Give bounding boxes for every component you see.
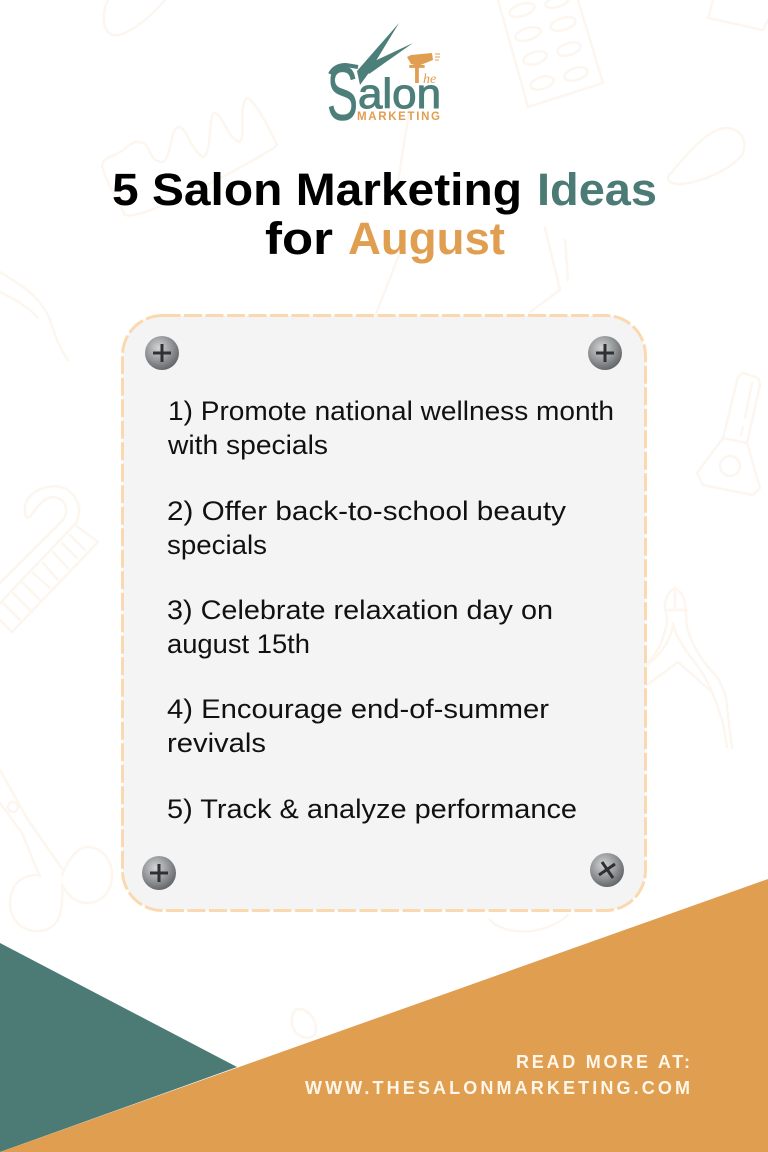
text: list of ideas: specials xyxy=(167,530,267,560)
logo word: Salon xyxy=(327,52,441,137)
text: list of ideas: with specials xyxy=(167,430,328,460)
icon: screw bottom right xyxy=(590,853,624,887)
text: list of ideas: 3) Celebrate relaxation day on xyxy=(167,595,553,625)
panel: ideas list card xyxy=(122,316,646,910)
bottom orange triangle xyxy=(0,879,768,1152)
icon: screw bottom left xyxy=(142,856,176,890)
logo word: Salon: alon xyxy=(358,70,441,117)
bottom teal triangle xyxy=(0,943,237,1152)
title: Ideas xyxy=(537,164,657,215)
logo word: The: he xyxy=(423,72,436,87)
logo word: Salon: S xyxy=(327,52,358,137)
logo xyxy=(327,23,441,137)
text: list of ideas xyxy=(167,396,614,824)
footer call to action xyxy=(305,1052,690,1098)
title xyxy=(112,164,657,264)
title: August xyxy=(348,213,505,264)
text: list of ideas: 2) Offer back-to-school beauty xyxy=(167,496,567,526)
text: list of ideas: 1) Promote national wellness month xyxy=(168,396,614,426)
footer call to action: WWW.THESALONMARKETING.COM xyxy=(305,1078,690,1098)
title: for xyxy=(265,213,333,264)
icon: hair dryer xyxy=(407,53,440,66)
text: list of ideas: revivals xyxy=(167,728,266,758)
logo word: The: T xyxy=(409,59,425,89)
icon: screw top left xyxy=(145,336,179,370)
title: 5 Salon Marketing xyxy=(112,164,522,215)
icon: scissors xyxy=(330,23,413,85)
text: list of ideas: 4) Encourage end-of-summer xyxy=(167,694,549,724)
footer call to action: READ MORE AT: xyxy=(516,1052,690,1072)
text: list of ideas: 5) Track & analyze performance xyxy=(167,794,577,824)
logo word: Marketing: MARKETING xyxy=(357,111,440,123)
text: list of ideas: august 15th xyxy=(167,629,310,659)
icon: screw top right xyxy=(588,336,622,370)
